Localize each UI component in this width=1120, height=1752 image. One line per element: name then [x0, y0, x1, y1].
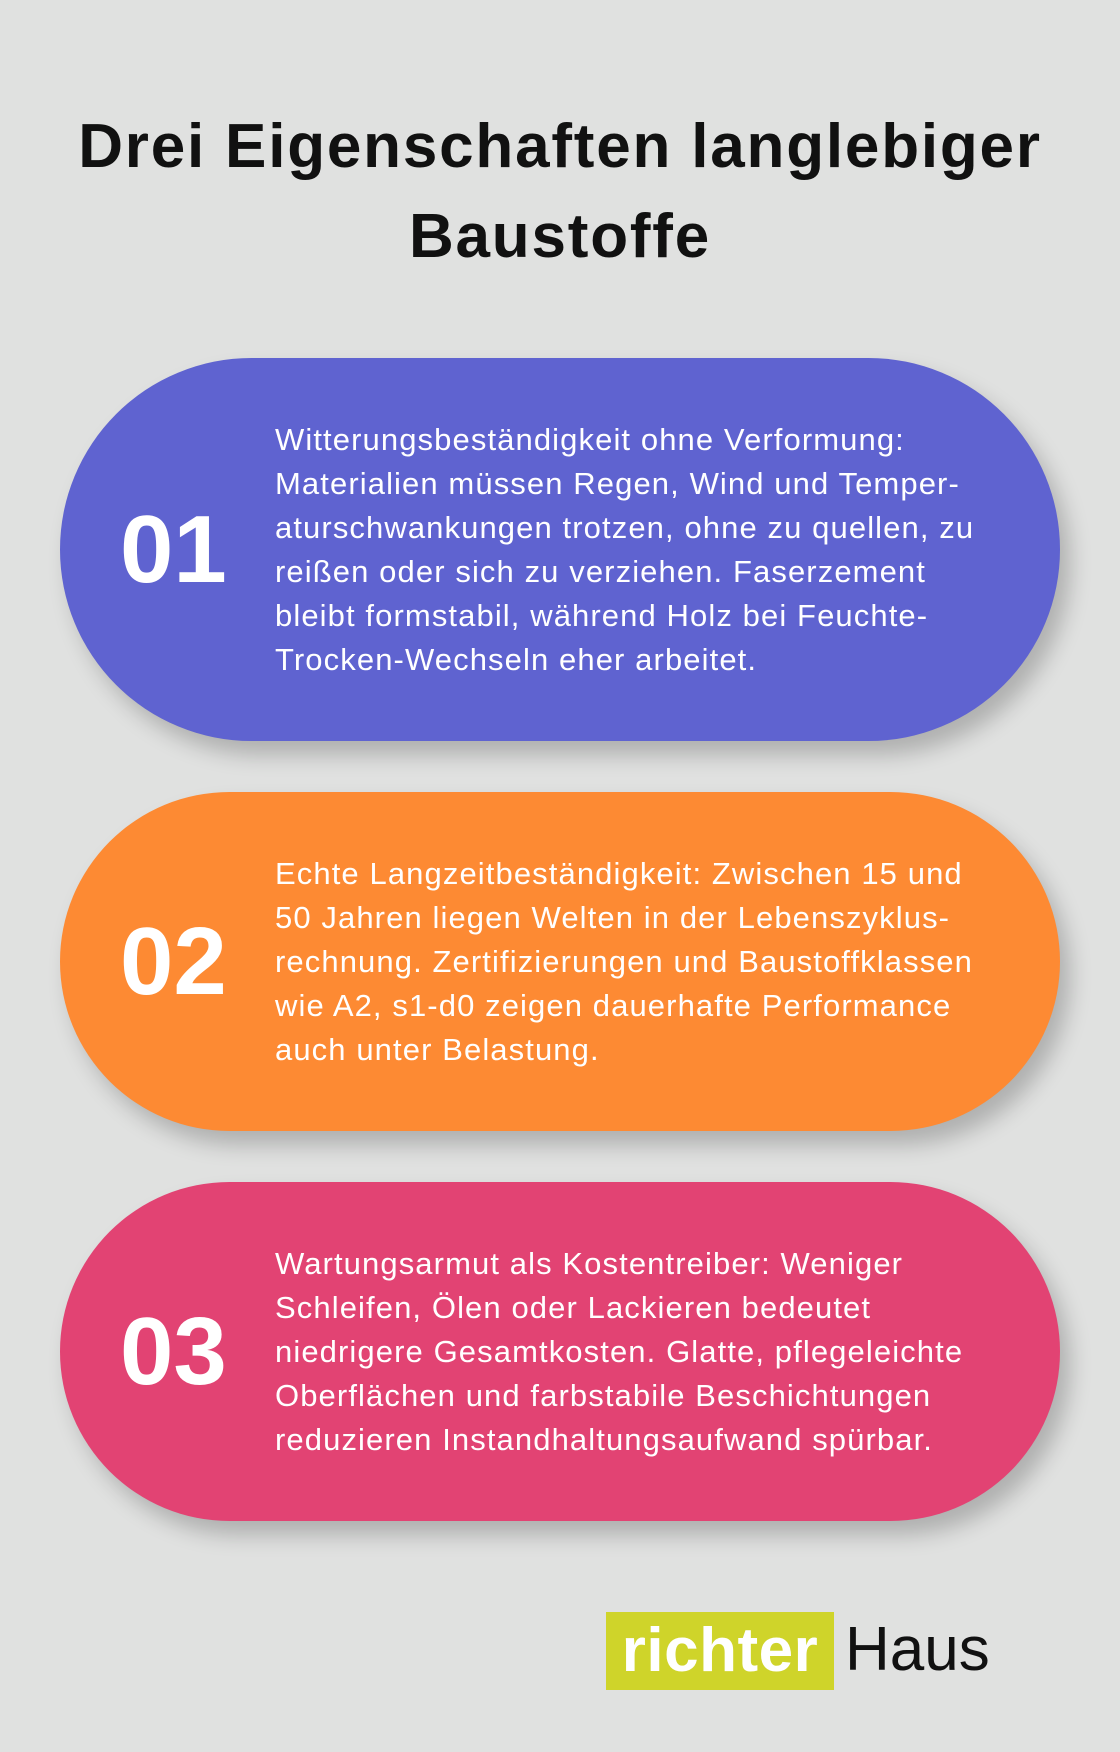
text 01: Witterungsbeständigkeit ohne Verformung:	[275, 422, 905, 456]
number 01: 01	[120, 496, 227, 602]
title	[78, 112, 1042, 271]
number 03: 03	[120, 1298, 227, 1404]
text 03: reduzieren Instandhaltungsaufwand spürbar.	[275, 1422, 933, 1456]
text 03: niedrigere Gesamtkosten. Glatte, pflegeleichte	[275, 1334, 963, 1368]
text 01: aturschwankungen trotzen, ohne zu quellen, zu	[275, 510, 974, 544]
text 01: Trocken-Wechseln eher arbeitet.	[275, 642, 757, 676]
panel: 02	[60, 792, 1060, 1131]
text 02: rechnung. Zertifizierungen und Baustoffklassen	[275, 944, 973, 978]
panel: 01	[60, 358, 1060, 741]
logo	[606, 1612, 990, 1690]
text 01: reißen oder sich zu verziehen. Faserzement	[275, 554, 926, 588]
text 01	[275, 422, 974, 676]
title: Baustoffe	[409, 202, 711, 271]
logo box: richter	[622, 1616, 818, 1685]
logo text: Haus	[845, 1615, 990, 1684]
panel: 03	[60, 1182, 1060, 1521]
text 01: Materialien müssen Regen, Wind und Temper-	[275, 466, 960, 500]
text 03	[275, 1246, 963, 1456]
title: Drei Eigenschaften langlebiger	[78, 112, 1042, 181]
text 03: Oberflächen und farbstabile Beschichtungen	[275, 1378, 931, 1412]
text 02	[275, 856, 973, 1066]
text 03: Wartungsarmut als Kostentreiber: Weniger	[275, 1246, 903, 1280]
text 03: Schleifen, Ölen oder Lackieren bedeutet	[275, 1290, 871, 1324]
number 02: 02	[120, 908, 227, 1014]
text 02: Echte Langzeitbeständigkeit: Zwischen 15 und	[275, 856, 963, 890]
text 02: wie A2, s1-d0 zeigen dauerhafte Performance	[275, 988, 951, 1022]
text 02: auch unter Belastung.	[275, 1032, 600, 1066]
text 02: 50 Jahren liegen Welten in der Lebenszyklus-	[275, 900, 950, 934]
text 01: bleibt formstabil, während Holz bei Feuchte-	[275, 598, 928, 632]
